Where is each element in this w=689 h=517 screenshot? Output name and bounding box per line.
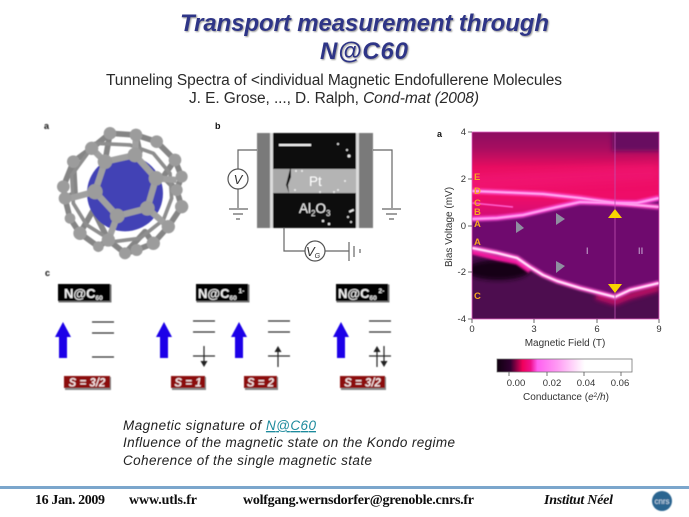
panel c: spin level diagrams	[45, 268, 391, 390]
icon: yellow marker triangles	[608, 209, 622, 293]
icon: CNRS logo: cnrs	[654, 497, 670, 506]
y axis: 4	[461, 127, 466, 138]
V meter	[228, 169, 248, 189]
footer bar	[0, 486, 689, 489]
label: S = 3/2	[340, 376, 386, 390]
label: S = 3/2	[64, 376, 111, 390]
micrograph: 2	[311, 209, 316, 218]
label: N@C60 1-	[196, 284, 250, 302]
legend: colour bar: 0.06	[611, 378, 629, 389]
footer text: Institut Néel	[543, 493, 613, 508]
label: S = 2: S = 2	[247, 378, 275, 390]
title: Transport measurement through	[180, 10, 549, 37]
footer text: wolfgang.wernsdorfer@grenoble.cnrs.fr	[243, 493, 474, 508]
icon: front cage bonds	[70, 135, 177, 240]
icon: nitrogen sphere	[87, 155, 163, 231]
subtitle: paper reference: Tunneling Spectra of <individual Magnetic Endofullerene Molecules	[106, 72, 562, 89]
text block: notes	[123, 418, 455, 468]
x axis: 6	[594, 324, 600, 335]
x axis: 3	[531, 324, 537, 335]
text block: notes: Coherence of the single magnetic state	[123, 453, 372, 468]
icon: electron spin arrows	[200, 346, 388, 367]
label: N@C60: 60	[95, 295, 103, 302]
label: N@C60 2-: 2-	[377, 288, 384, 295]
micrograph: O	[315, 201, 326, 216]
label: N@C60 2-	[336, 284, 390, 302]
legend: colour bar: 2	[594, 392, 598, 399]
level letters: B	[474, 207, 481, 218]
x axis	[469, 319, 662, 349]
y axis	[444, 127, 472, 325]
footer text	[35, 493, 613, 508]
label: N@C60: N@C	[64, 286, 95, 301]
text block: notes: Magnetic signature of N@C60	[123, 418, 316, 433]
energy levels	[92, 321, 391, 357]
level letters: A	[474, 219, 481, 230]
label: S = 3/2: S = 3/2	[344, 378, 381, 390]
gate voltage meter	[305, 241, 325, 261]
level letters: C	[474, 291, 481, 302]
x axis: Magnetic Field (T)	[525, 338, 605, 349]
label: N@C60	[58, 284, 112, 302]
region labels: II	[638, 246, 643, 257]
y axis: 0	[461, 221, 466, 232]
icon: gray marker triangles	[516, 213, 565, 273]
level letters: E	[474, 172, 480, 183]
label: S = 2	[244, 376, 278, 390]
label: N@C60 2-: 60	[369, 295, 377, 302]
label: N@C60 1-: N@C	[198, 286, 229, 301]
micrograph	[257, 133, 373, 228]
legend: colour bar: )	[606, 392, 609, 403]
y axis: -2	[458, 267, 466, 278]
legend: colour bar: 0.02	[543, 378, 561, 389]
legend: colour bar: /h	[596, 392, 606, 403]
title: N@C60	[320, 38, 409, 65]
subtitle: paper reference: J. E. Grose, ..., D. Ralph, Cond-mat (2008)	[189, 90, 479, 107]
level letters: A	[474, 237, 481, 248]
legend: colour bar: Conductance (e	[523, 392, 594, 403]
footer text: www.utls.fr	[129, 493, 197, 508]
chart: conductance heat map: a	[437, 129, 443, 139]
y axis: 2	[461, 174, 466, 185]
circuit wires and grounds	[229, 150, 401, 261]
panel a: N@C60 molecule	[44, 121, 188, 259]
label: N@C60 1-: 60	[229, 295, 237, 302]
label: N@C60 2-: N@C	[338, 286, 369, 301]
level letters: D	[474, 186, 481, 197]
bright transition lines	[472, 191, 659, 297]
heat map field	[472, 132, 659, 319]
legend: colour bar: 0.04	[577, 378, 595, 389]
panel c: spin level diagrams: c	[45, 268, 50, 278]
y axis: Bias Voltage (mV)	[444, 187, 455, 267]
label: S = 1	[171, 376, 206, 390]
legend: colour bar: 0.00	[507, 378, 525, 389]
panel b: device micrograph and circuit	[215, 121, 401, 261]
label: N@C60 1-: 1-	[237, 288, 244, 295]
icon: back cage bonds	[63, 133, 182, 253]
chart: conductance heat map	[437, 125, 667, 349]
label: S = 3/2: S = 3/2	[69, 378, 106, 390]
text block: notes: Influence of the magnetic state on the Kondo regime	[123, 435, 455, 450]
region labels: I	[586, 246, 589, 257]
micrograph: 3	[326, 209, 331, 218]
icon: CNRS logo	[652, 491, 672, 511]
micrograph: Al	[299, 201, 311, 216]
x axis: 9	[656, 324, 662, 335]
title	[180, 10, 549, 65]
label: S = 1: S = 1	[174, 378, 202, 390]
panel b: device micrograph and circuit: b	[215, 121, 221, 131]
y axis: -4	[458, 314, 466, 325]
icon: blue spin arrows	[55, 322, 349, 358]
gate voltage meter: G	[315, 253, 321, 260]
region labels	[586, 246, 643, 257]
gate voltage meter: V	[306, 244, 315, 259]
panel a: N@C60 molecule: a	[44, 121, 50, 131]
legend: colour bar	[497, 359, 632, 403]
V meter: V	[234, 172, 244, 187]
subtitle: paper reference	[106, 72, 562, 107]
level letters	[474, 172, 481, 302]
x axis: 0	[469, 324, 475, 335]
micrograph: Pt	[309, 174, 322, 189]
level letters: C	[474, 198, 481, 209]
icon: cage atoms	[57, 127, 188, 259]
footer text: 16 Jan. 2009	[35, 493, 105, 508]
